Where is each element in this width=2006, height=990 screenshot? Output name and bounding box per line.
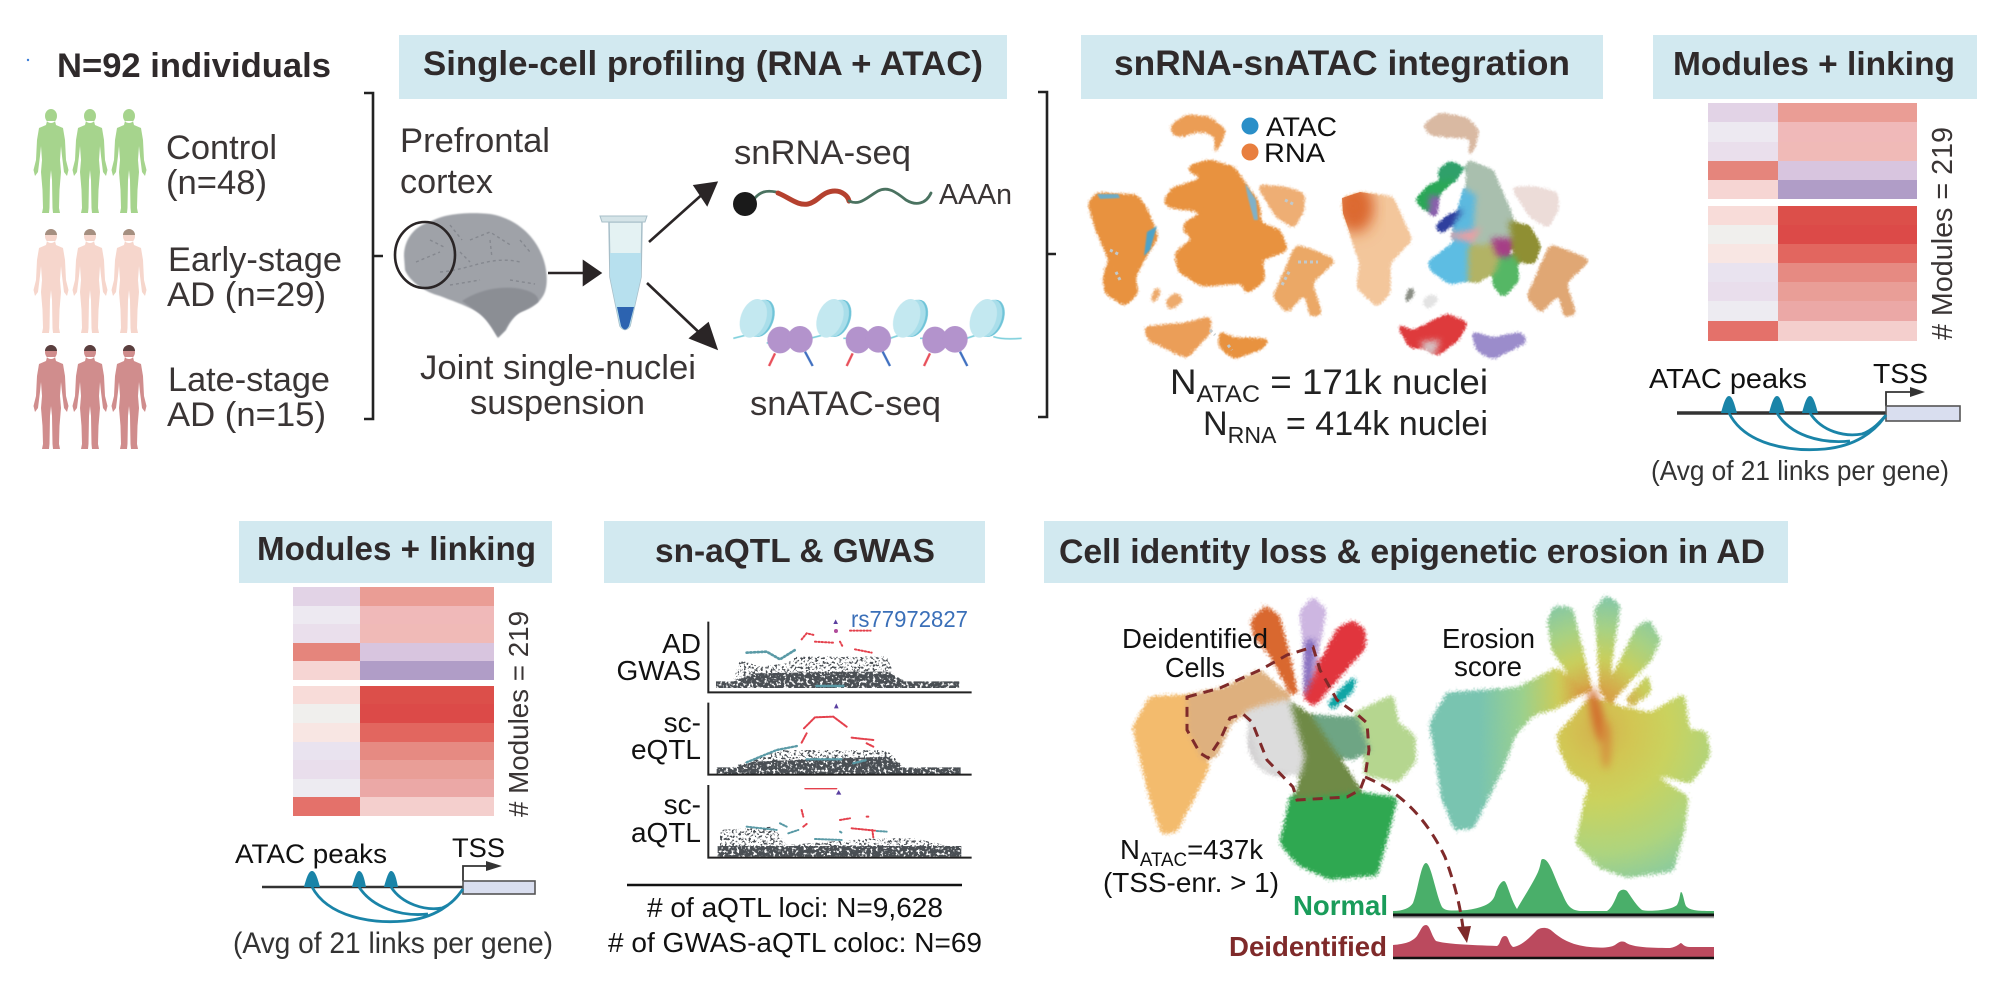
- chart: UMAP by modality: [1088, 115, 1336, 359]
- panel: integration: [1081, 35, 1603, 448]
- text: Normal label: Normal: [1293, 890, 1388, 921]
- outline: deidentified cells region: [1187, 647, 1369, 800]
- icon: brain: [395, 213, 547, 338]
- text: TSS: TSS: [1873, 358, 1928, 389]
- text: control group: [166, 129, 277, 202]
- text: N ATAC count: = 171k nuclei: [1260, 363, 1488, 402]
- icon: late-stage individuals: [34, 345, 146, 449]
- text: snATAC-seq: snATAC-seq: [750, 385, 941, 423]
- text: joint single-nuclei suspension: [420, 349, 696, 422]
- text: control group: (n=48): [166, 164, 267, 202]
- text: deidentified cells label: [1122, 623, 1268, 683]
- icon: blue speck: [27, 59, 29, 61]
- heading: integration: snRNA-snATAC integration: [1114, 44, 1570, 83]
- text: N ATAC count: N: [1170, 363, 1195, 402]
- panel: modules + linking (bottom): [233, 521, 553, 960]
- panel: modules + linking (top): [1649, 35, 1977, 486]
- chart: UMAP by cell type: [1338, 113, 1590, 359]
- arrow: to snATAC: [647, 283, 716, 348]
- text: ATAC peaks: ATAC peaks: [1649, 363, 1807, 394]
- text: erosion score label: Erosion: [1442, 623, 1535, 654]
- arrow: deidentified to track: [1365, 777, 1471, 943]
- chart: heatmap: [1708, 103, 1917, 341]
- heading: integration: [1081, 35, 1603, 99]
- heading: cell identity loss: Cell identity loss & epigenetic erosion in AD: [1059, 533, 1765, 571]
- text: panel labels: AD: [662, 628, 701, 659]
- arrow: to snRNA: [649, 183, 716, 242]
- text: joint single-nuclei suspension: Joint single-nuclei: [420, 349, 696, 387]
- text: late-stage group: AD (n=15): [167, 396, 326, 434]
- text: ATAC peaks lower: ATAC peaks: [235, 839, 387, 869]
- arrow: brain to tube: [548, 262, 600, 284]
- legend: modality: ATAC: [1266, 112, 1337, 142]
- chart: locus plots: [708, 619, 972, 858]
- text: GWAS coloc: # of GWAS-aQTL coloc: N=69: [608, 927, 982, 958]
- text: N RNA count: = 414k nuclei: [1276, 405, 1488, 443]
- heading: modules + linking lower: Modules + linking: [257, 530, 536, 567]
- text: TSS lower: TSS: [452, 833, 505, 863]
- heading: modules + linking: [1653, 35, 1977, 99]
- text: panel labels: GWAS: [616, 655, 701, 686]
- bracket: left: [364, 93, 383, 419]
- text: N ATAC total: ATAC: [1140, 850, 1187, 871]
- chart: deidentified track: [1393, 925, 1714, 958]
- heading: single-cell profiling: Single-cell profiling (RNA + ATAC): [423, 45, 983, 83]
- text: erosion score label: score: [1454, 651, 1522, 682]
- text: joint single-nuclei suspension: suspension: [470, 384, 645, 422]
- heading: modules + linking: Modules + linking: [1673, 45, 1955, 82]
- text: early-stage group: [167, 241, 342, 314]
- heading: N=92 individuals: N=92 individuals: [57, 47, 331, 85]
- legend: modality: RNA: [1264, 138, 1325, 168]
- text: panel labels: [616, 628, 701, 848]
- text: Deidentified label: Deidentified: [1229, 931, 1387, 962]
- text: prefrontal cortex: cortex: [400, 163, 493, 201]
- text: control group: Control: [166, 129, 277, 167]
- chart: UMAP cell types: [1133, 597, 1415, 879]
- text: late-stage group: [167, 361, 330, 434]
- text: late-stage group: Late-stage: [168, 361, 330, 399]
- text: N RNA count: RNA: [1228, 422, 1277, 448]
- text: early-stage group: AD (n=29): [167, 276, 326, 314]
- icon: mRNA strand: [733, 189, 931, 216]
- text: N ATAC count: ATAC: [1197, 381, 1260, 408]
- text: N ATAC total: N: [1120, 834, 1140, 865]
- chart: UMAP erosion score: [1430, 596, 1710, 877]
- text: modules count lower: # Modules = 219: [503, 611, 534, 817]
- icon: tube: [600, 216, 647, 330]
- panel: cell identity loss: [1044, 521, 1788, 962]
- icon: prefrontal circle: [395, 222, 455, 288]
- text: prefrontal cortex: [400, 122, 550, 201]
- panel: cohort: [34, 47, 342, 449]
- text: early-stage group: Early-stage: [168, 241, 342, 279]
- text: N RNA count: N: [1203, 405, 1228, 443]
- text: snRNA-seq: snRNA-seq: [734, 134, 911, 172]
- legend: modality: [1242, 112, 1337, 168]
- text: AAAn: AAAn: [939, 179, 1012, 211]
- panel: aQTL and GWAS: [604, 521, 985, 958]
- text: panel labels: sc-: [664, 707, 701, 738]
- text: TSS enrichment: (TSS-enr. > 1): [1103, 867, 1279, 898]
- text: panel labels: eQTL: [631, 734, 701, 765]
- icon: control individuals: [34, 109, 146, 213]
- text: deidentified cells label: Cells: [1165, 652, 1225, 683]
- bracket: right: [1038, 92, 1056, 417]
- text: deidentified cells label: Deidentified: [1122, 623, 1268, 654]
- heading: aQTL and GWAS: [604, 521, 985, 583]
- text: prefrontal cortex: Prefrontal: [400, 122, 550, 160]
- panel: single-cell profiling: [395, 35, 1022, 423]
- diagram: peak links: [1677, 387, 1960, 450]
- icon: early-stage individuals: [34, 229, 146, 333]
- heading: cell identity loss: [1044, 521, 1788, 583]
- chart: normal track: [1393, 859, 1714, 918]
- text: aQTL loci: # of aQTL loci: N=9,628: [647, 892, 943, 923]
- heading: modules + linking lower: [239, 521, 552, 583]
- icon: chromatin with Tn5: [733, 295, 1022, 366]
- divider rule: [627, 884, 962, 886]
- text: panel labels: sc-: [664, 789, 701, 820]
- diagram: peak links lower: [262, 861, 535, 922]
- text: erosion score label: [1442, 623, 1535, 682]
- text: panel labels: aQTL: [631, 817, 701, 848]
- text: modules count: # Modules = 219: [1927, 127, 1959, 340]
- text: avg links lower: (Avg of 21 links per gene): [233, 927, 553, 960]
- text: rsID: rs77972827: [851, 606, 968, 632]
- chart: heatmap lower: [293, 587, 494, 816]
- text: avg links: (Avg of 21 links per gene): [1651, 455, 1949, 486]
- heading: single-cell profiling: [399, 35, 1007, 99]
- heading: aQTL and GWAS: sn-aQTL & GWAS: [655, 532, 935, 569]
- text: N ATAC total: =437k: [1187, 834, 1264, 865]
